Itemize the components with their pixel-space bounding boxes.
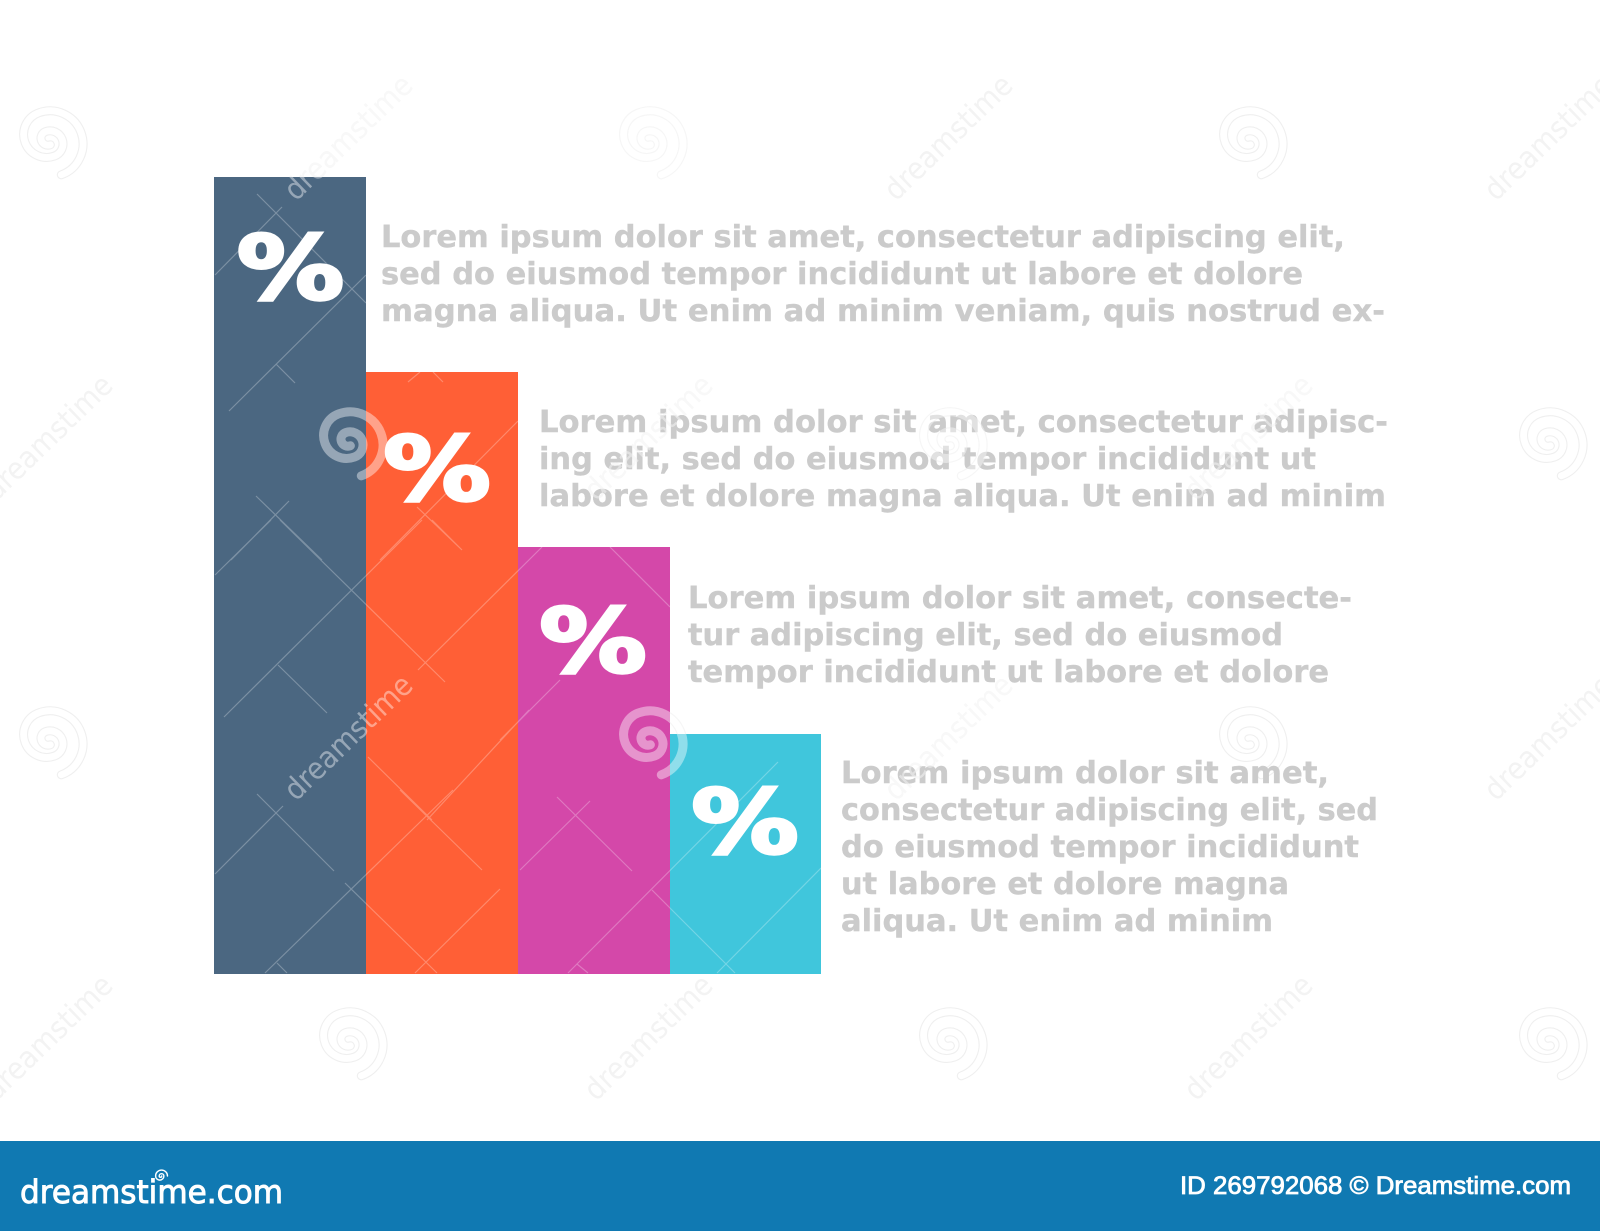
text block 2: [539, 405, 1388, 514]
background watermark pattern: dreamstime: [577, 368, 720, 508]
text block 2: labore et dolore magna aliqua. Ut enim ad minim: [539, 479, 1386, 514]
text block 4: do eiusmod tempor incididunt: [841, 830, 1359, 865]
text block 1: Lorem ipsum dolor sit amet, consectetur adipiscing elit,: [381, 220, 1345, 255]
watermark overlay on bars and text: dreamstime: [1177, 368, 1320, 508]
text block 3: tur adipiscing elit, sed do eiusmod: [688, 618, 1283, 653]
watermark overlay on bars and text: dreamstime: [277, 68, 420, 208]
background watermark pattern: dreamstime: [577, 968, 720, 1108]
text block 4: ut labore et dolore magna: [841, 867, 1289, 902]
bar 1: slate blue: [214, 177, 366, 974]
bar 4: cyan: [670, 734, 821, 974]
text block 3: Lorem ipsum dolor sit amet, consecte-: [688, 581, 1352, 616]
background watermark pattern: dreamstime: [1177, 968, 1320, 1108]
watermark overlay on bars and text: dreamstime: [577, 368, 720, 508]
background watermark pattern: dreamstime: [1177, 368, 1320, 508]
text block 1: magna aliqua. Ut enim ad minim veniam, quis nostrud ex-: [381, 294, 1385, 329]
text block 4: Lorem ipsum dolor sit amet,: [841, 756, 1329, 791]
background watermark pattern: dreamstime: [877, 68, 1020, 208]
text block 2: Lorem ipsum dolor sit amet, consectetur adipisc-: [539, 405, 1388, 440]
watermark overlay on bars and text: dreamstime: [277, 668, 420, 808]
percent sign on bar 2: %: [384, 418, 490, 521]
text block 3: [688, 581, 1352, 690]
background watermark pattern: dreamstime: [277, 68, 420, 208]
text block 3: tempor incididunt ut labore et dolore: [688, 655, 1329, 690]
text block 1: [381, 220, 1385, 329]
descending bar chart: [214, 177, 821, 974]
bar 3: magenta: [518, 547, 670, 974]
image id credit: ID 269792068 © Dreamstime.com: [1180, 1172, 1571, 1200]
text block 4: consectetur adipiscing elit, sed: [841, 793, 1378, 828]
footer logo spiral icon: [156, 1170, 167, 1180]
percent sign on bar 3: %: [540, 590, 646, 693]
percent sign on bar 4: %: [692, 771, 798, 874]
background watermark pattern: dreamstime: [877, 668, 1020, 808]
footer logo wordmark: dreamstime.com: [20, 1173, 283, 1211]
watermark overlay on bars and text: dreamstime: [877, 668, 1020, 808]
text block 4: aliqua. Ut enim ad minim: [841, 904, 1273, 939]
text block 2: ing elit, sed do eiusmod tempor incididunt ut: [539, 442, 1316, 477]
bar 2: orange: [366, 372, 518, 974]
watermark overlay on bars and text: [277, 68, 1320, 808]
footer bar: [0, 1141, 1600, 1231]
text block 4: [841, 756, 1378, 939]
text block 1: sed do eiusmod tempor incididunt ut labore et dolore: [381, 257, 1303, 292]
percent sign on bar 1: %: [237, 217, 344, 320]
